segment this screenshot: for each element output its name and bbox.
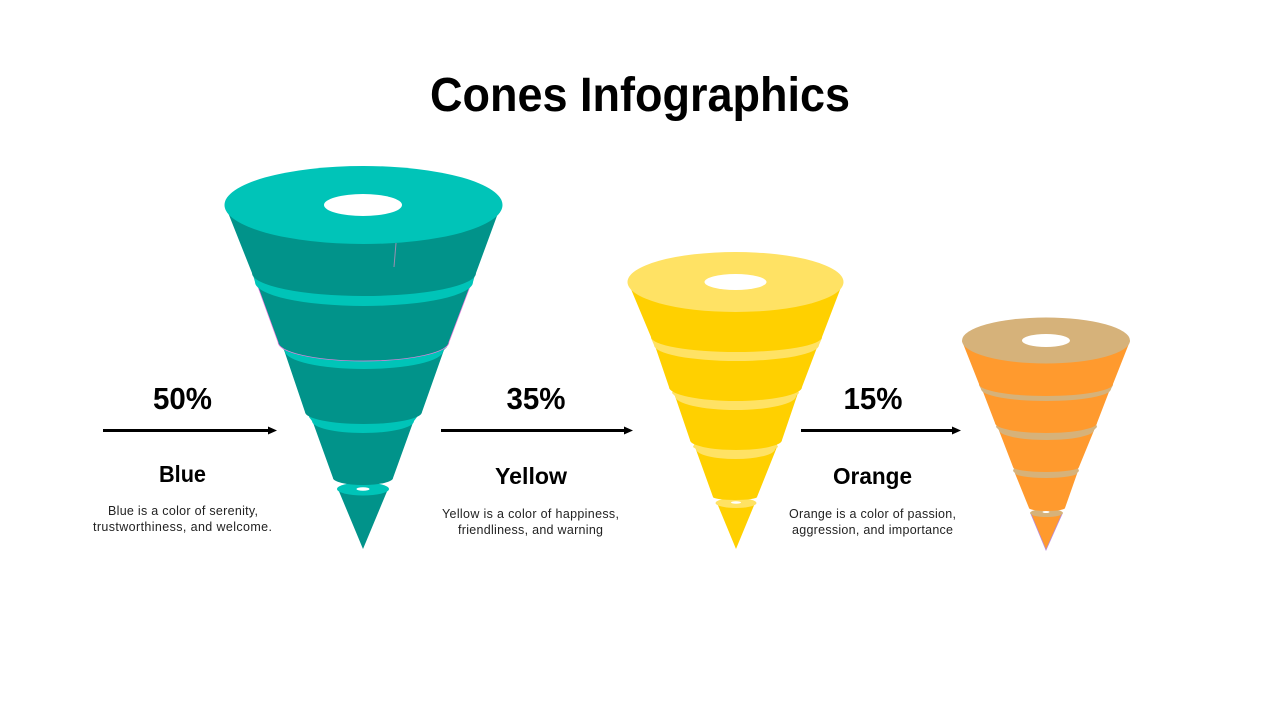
heading: Orange: Orange [833,463,912,489]
heading: Yellow: Yellow [495,463,567,489]
text: yellow description: Yellow is a color of happiness, [442,507,619,521]
chart: orange cone [962,318,1130,550]
panel: orange label group [789,381,961,537]
percentage: 35%: 35% [506,381,566,416]
text: yellow description: friendliness, and warning [458,523,603,537]
text: blue description [93,504,272,534]
arrow: yellow [441,426,633,434]
text: orange description: Orange is a color of passion, [789,507,956,521]
arrow: blue [103,426,277,434]
text: blue description: trustworthiness, and welcome. [93,520,272,534]
text: orange description [789,507,956,537]
percentage: 50%: 50% [153,381,212,416]
chart: blue cone [224,166,502,549]
title: Cones Infographics [430,69,850,122]
heading: Blue: Blue [159,461,206,487]
text: blue description: Blue is a color of serenity, [108,504,258,518]
arrow: orange [801,426,961,434]
percentage: 15%: 15% [844,381,902,416]
text: orange description: aggression, and importance [792,523,953,537]
text: yellow description [442,507,619,537]
chart: yellow cone [628,252,844,549]
panel: yellow label group [441,381,633,537]
panel: blue label group [93,381,277,534]
